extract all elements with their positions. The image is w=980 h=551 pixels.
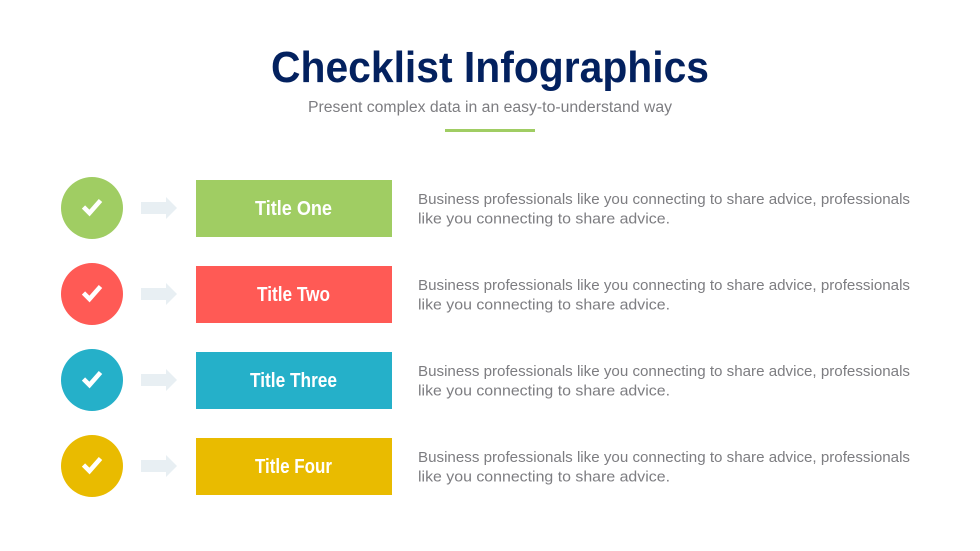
description: Business professionals like you connecting to share advice, professionals	[418, 191, 910, 208]
description: like you connecting to share advice.	[418, 210, 670, 228]
description: like you connecting to share advice.	[418, 296, 670, 314]
label box: title three	[196, 352, 392, 409]
description: Business professionals like you connecting to share advice, professionals	[418, 277, 910, 294]
row 3: title three	[61, 349, 910, 411]
title underline	[445, 129, 535, 132]
description: like you connecting to share advice.	[418, 382, 670, 400]
description: Business professionals like you connecting to share advice, professionals	[418, 449, 910, 466]
description: like you connecting to share advice.	[418, 468, 670, 486]
description	[418, 363, 910, 400]
row 2: title two	[61, 263, 910, 325]
arrow	[141, 197, 177, 219]
label box: title one: Title One	[255, 198, 332, 220]
arrow	[141, 455, 177, 477]
description: Business professionals like you connecting to share advice, professionals	[418, 363, 910, 380]
label box: title four: Title Four	[255, 456, 332, 478]
description	[418, 449, 910, 486]
label box: title three: Title Three	[250, 370, 337, 392]
row 4: title four	[61, 435, 910, 497]
icon: red check circle	[61, 263, 123, 325]
label box: title four	[196, 438, 392, 495]
label box: title two: Title Two	[257, 284, 330, 306]
icon: teal check circle	[61, 349, 123, 411]
arrow	[141, 283, 177, 305]
arrow	[141, 369, 177, 391]
label box: title two	[196, 266, 392, 323]
title: Checklist Infographics	[271, 43, 709, 92]
label box: title one	[196, 180, 392, 237]
subtitle: Present complex data in an easy-to-understand way	[308, 99, 672, 116]
icon: yellow check circle	[61, 435, 123, 497]
icon: green check circle	[61, 177, 123, 239]
description	[418, 277, 910, 314]
row 1: title one	[61, 177, 910, 239]
description	[418, 191, 910, 228]
